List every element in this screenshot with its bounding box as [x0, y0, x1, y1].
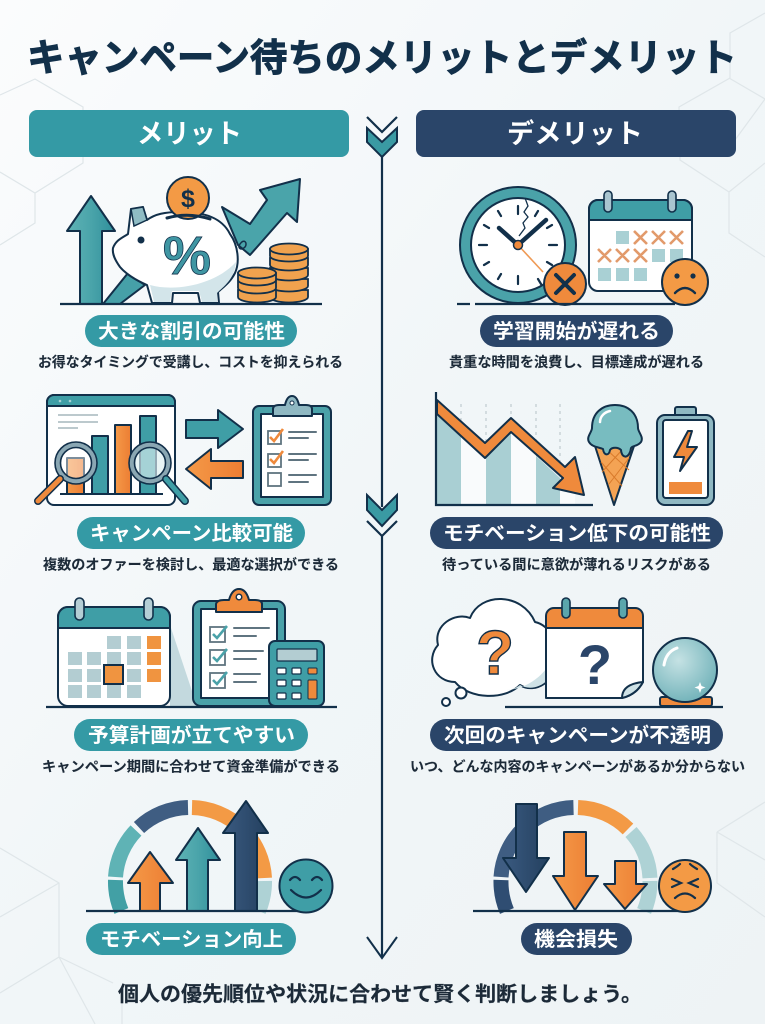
label pill: 学習開始が遅れる	[493, 319, 660, 343]
description: お得なタイミングで受講し、コストを抑えられる	[38, 354, 343, 370]
panel: demerit 1 delayed start	[449, 187, 708, 370]
panel: merit 2 comparison	[38, 395, 339, 572]
label pill	[521, 923, 632, 955]
heading: demerit	[416, 110, 736, 157]
label pill: 予算計画が立てやすい	[88, 723, 295, 747]
title: キャンペーン待ちのメリットとデメリット	[27, 37, 737, 80]
heading: merit: メリット	[137, 119, 242, 149]
icon: calendar	[58, 598, 197, 706]
heading: merit	[29, 110, 349, 157]
icon: thought cloud with question	[432, 599, 556, 706]
icon: gauge with falling arrows and upset face	[473, 804, 711, 912]
label pill: 大きな割引の可能性	[98, 320, 285, 343]
panel: demerit 4 missed opportunity	[473, 804, 711, 955]
icon: piggy bank with arrows and coins: $	[181, 185, 195, 213]
description: 複数のオファーを検討し、最適な選択ができる	[43, 556, 339, 572]
label pill: キャンペーン比較可能	[90, 522, 293, 545]
icon: clipboard checklist	[253, 396, 331, 505]
heading: demerit: デメリット	[507, 118, 643, 149]
icon: exchange arrows	[186, 410, 243, 489]
description: いつ、どんな内容のキャンペーンがあるか分からない	[410, 758, 745, 774]
icon: piggy bank with arrows and coins: %	[163, 226, 211, 286]
label pill	[77, 517, 305, 549]
closing message: 個人の優先順位や状況に合わせて賢く判断しましょう。	[118, 983, 642, 1006]
label pill	[430, 517, 723, 549]
label pill	[430, 719, 723, 751]
icon: calendar with question: ?	[578, 633, 612, 696]
label pill	[86, 923, 296, 955]
label pill: モチベーション低下の可能性	[443, 522, 711, 545]
icon: crystal ball	[505, 638, 723, 707]
icon: clipboard and calculator	[46, 589, 337, 707]
panel: demerit 3 uncertain next campaign	[410, 598, 745, 774]
label pill: 機会損失	[534, 928, 618, 951]
description: キャンペーン期間に合わせて資金準備ができる	[42, 758, 340, 774]
icon: calendar with question	[546, 598, 643, 698]
icon: low battery	[657, 407, 714, 505]
label pill: 次回のキャンペーンが不透明	[444, 723, 711, 747]
label pill	[480, 315, 673, 347]
center timeline arrow	[367, 117, 397, 958]
panel: demerit 2 motivation drop	[430, 392, 723, 572]
icon: falling chart	[436, 392, 593, 505]
label pill	[85, 315, 297, 347]
description: 待っている間に意欲が薄れるリスクがある	[442, 556, 711, 572]
icon: piggy bank with arrows and coins	[60, 177, 322, 304]
description: 貴重な時間を浪費し、目標達成が遅れる	[449, 354, 704, 370]
icon: browser chart with magnifiers	[38, 395, 185, 505]
icon: cracked clock and calendar	[457, 187, 708, 305]
panel: merit 4 motivation up	[86, 801, 332, 955]
icon: thought cloud with question: ?	[476, 619, 514, 688]
label pill	[74, 719, 308, 751]
icon: melting ice cream	[588, 405, 642, 505]
icon: gauge with rising arrows and smile	[86, 801, 332, 912]
panel: merit 3 budget planning	[42, 589, 340, 774]
label pill: モチベーション向上	[100, 928, 283, 951]
panel: merit 1 large discount	[38, 177, 343, 370]
